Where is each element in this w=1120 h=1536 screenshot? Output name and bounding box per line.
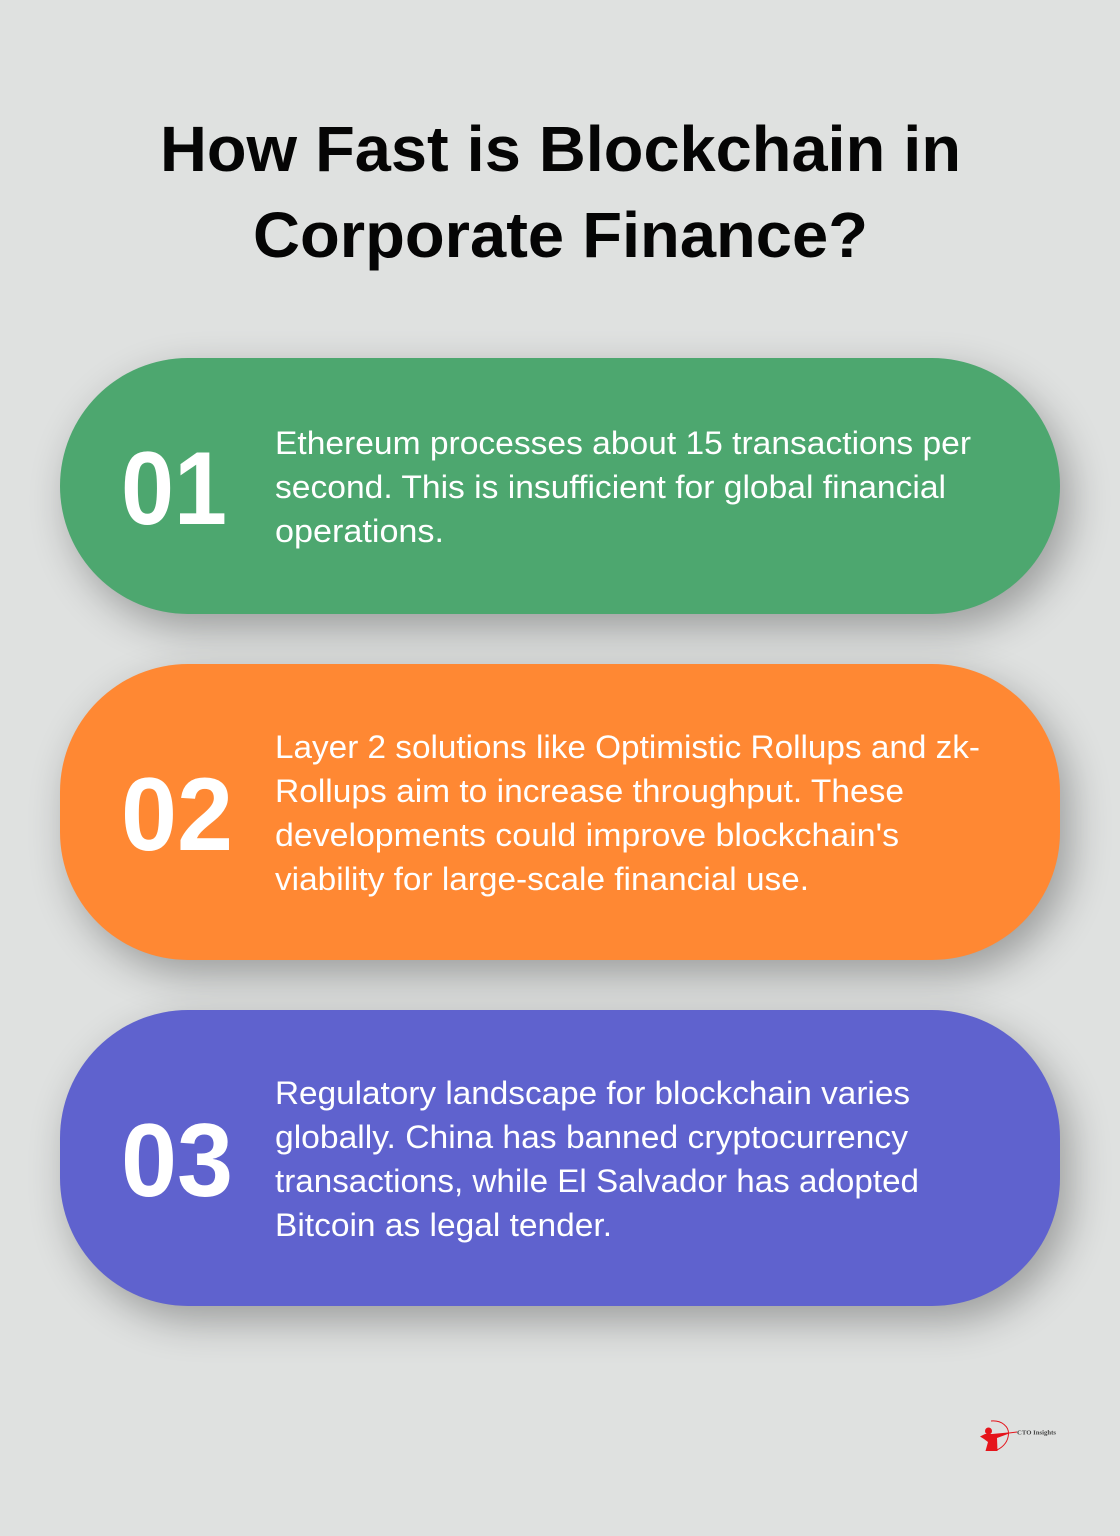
logo: CTO Insights — [980, 1420, 1057, 1451]
text: Ethereum throughput — [275, 425, 971, 549]
text: regulatory landscape — [275, 1075, 919, 1243]
logo text: CTO Insights — [1017, 1430, 1057, 1436]
text: Layer 2 solutions: developments could improve blockchain's — [275, 817, 899, 853]
text: Ethereum throughput: operations. — [275, 513, 444, 549]
number 03: 03 — [121, 1103, 233, 1219]
text: Ethereum throughput: second. This is insufficient for global financial — [275, 469, 946, 505]
text: Layer 2 solutions: Rollups aim to increase throughput. These — [275, 773, 904, 809]
panel: step 01 — [60, 358, 1060, 614]
text: regulatory landscape: globally. China has banned cryptocurrency — [275, 1119, 908, 1155]
text: Layer 2 solutions: viability for large-scale financial use. — [275, 861, 809, 897]
text: regulatory landscape: Bitcoin as legal tender. — [275, 1207, 612, 1243]
text: Ethereum throughput: Ethereum processes about 15 transactions per — [275, 425, 971, 461]
panel: step 02 — [60, 664, 1060, 960]
text: regulatory landscape: Regulatory landscape for blockchain varies — [275, 1075, 910, 1111]
title: Corporate Finance? — [253, 199, 868, 271]
text: Layer 2 solutions — [275, 729, 980, 897]
text: Layer 2 solutions: Layer 2 solutions like Optimistic Rollups and zk- — [275, 729, 980, 765]
number 01: 01 — [121, 431, 227, 547]
title: How Fast is Blockchain in — [160, 113, 961, 185]
title — [160, 113, 961, 271]
number 02: 02 — [121, 757, 233, 873]
icon: red archer — [980, 1421, 1017, 1451]
panel: step 03 — [60, 1010, 1060, 1306]
text: regulatory landscape: transactions, while El Salvador has adopted — [275, 1163, 919, 1199]
